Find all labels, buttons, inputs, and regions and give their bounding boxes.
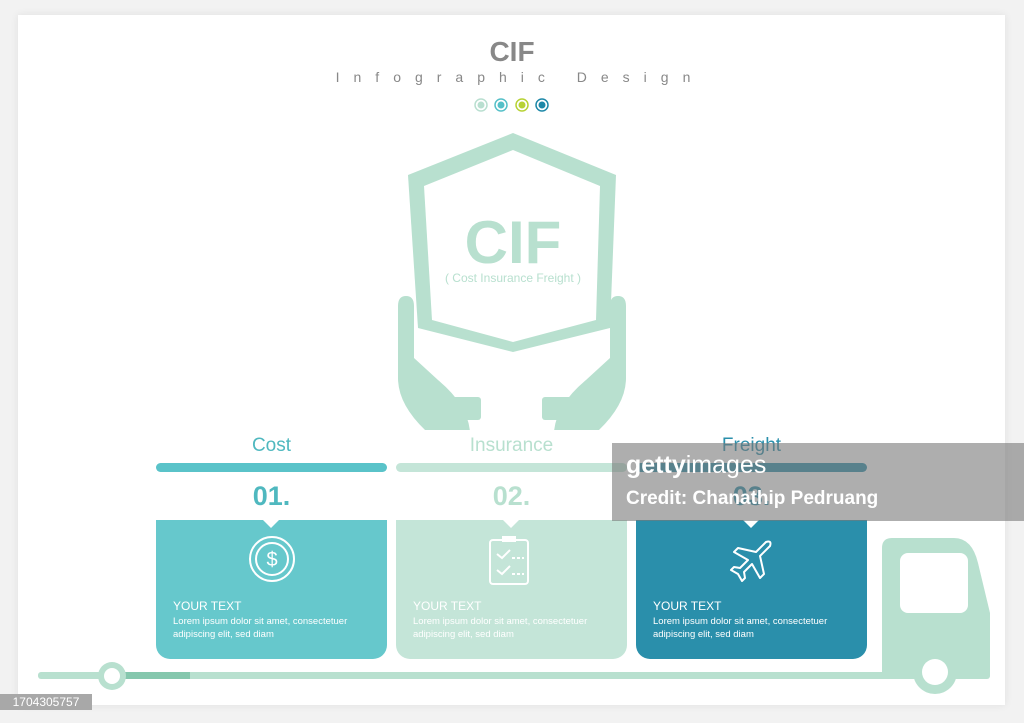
watermark overlay: gettyimages (626, 451, 766, 479)
truck (38, 538, 990, 694)
text: 02. (493, 481, 530, 511)
column: freight (636, 435, 867, 659)
title: CIF (489, 36, 535, 67)
text: $ (266, 549, 278, 571)
subtitle: Infographic Design (336, 69, 704, 85)
image id label: 1704305757 (13, 695, 79, 709)
text: YOUR TEXT (173, 599, 241, 613)
watermark overlay (612, 443, 1024, 521)
right hand (554, 296, 626, 438)
text: YOUR TEXT (653, 599, 721, 613)
text: 01. (253, 481, 290, 511)
shield held by hands: ( Cost Insurance Freight ) (445, 271, 581, 285)
text: Lorem ipsum dolor sit amet, consectetuer adipiscing elit, sed diam (173, 616, 347, 640)
watermark overlay: Credit: Chanathip Pedruang (626, 488, 878, 509)
text: Cost (252, 435, 291, 456)
text: Lorem ipsum dolor sit amet, consectetuer adipiscing elit, sed diam (413, 616, 587, 640)
column: insurance (396, 435, 627, 659)
shield held by hands: CIF (465, 209, 561, 276)
left hand (398, 296, 470, 438)
white cut around cards (148, 515, 878, 667)
image id label (0, 694, 92, 710)
text: 03. (733, 481, 770, 511)
column: cost (156, 435, 387, 659)
text: YOUR TEXT (413, 599, 481, 613)
dots (474, 98, 549, 112)
text: Insurance (470, 435, 553, 456)
text: Lorem ipsum dolor sit amet, consectetuer adipiscing elit, sed diam (653, 616, 827, 640)
text: Freight (722, 435, 781, 456)
shield held by hands (398, 133, 626, 430)
shield frame (408, 133, 616, 352)
